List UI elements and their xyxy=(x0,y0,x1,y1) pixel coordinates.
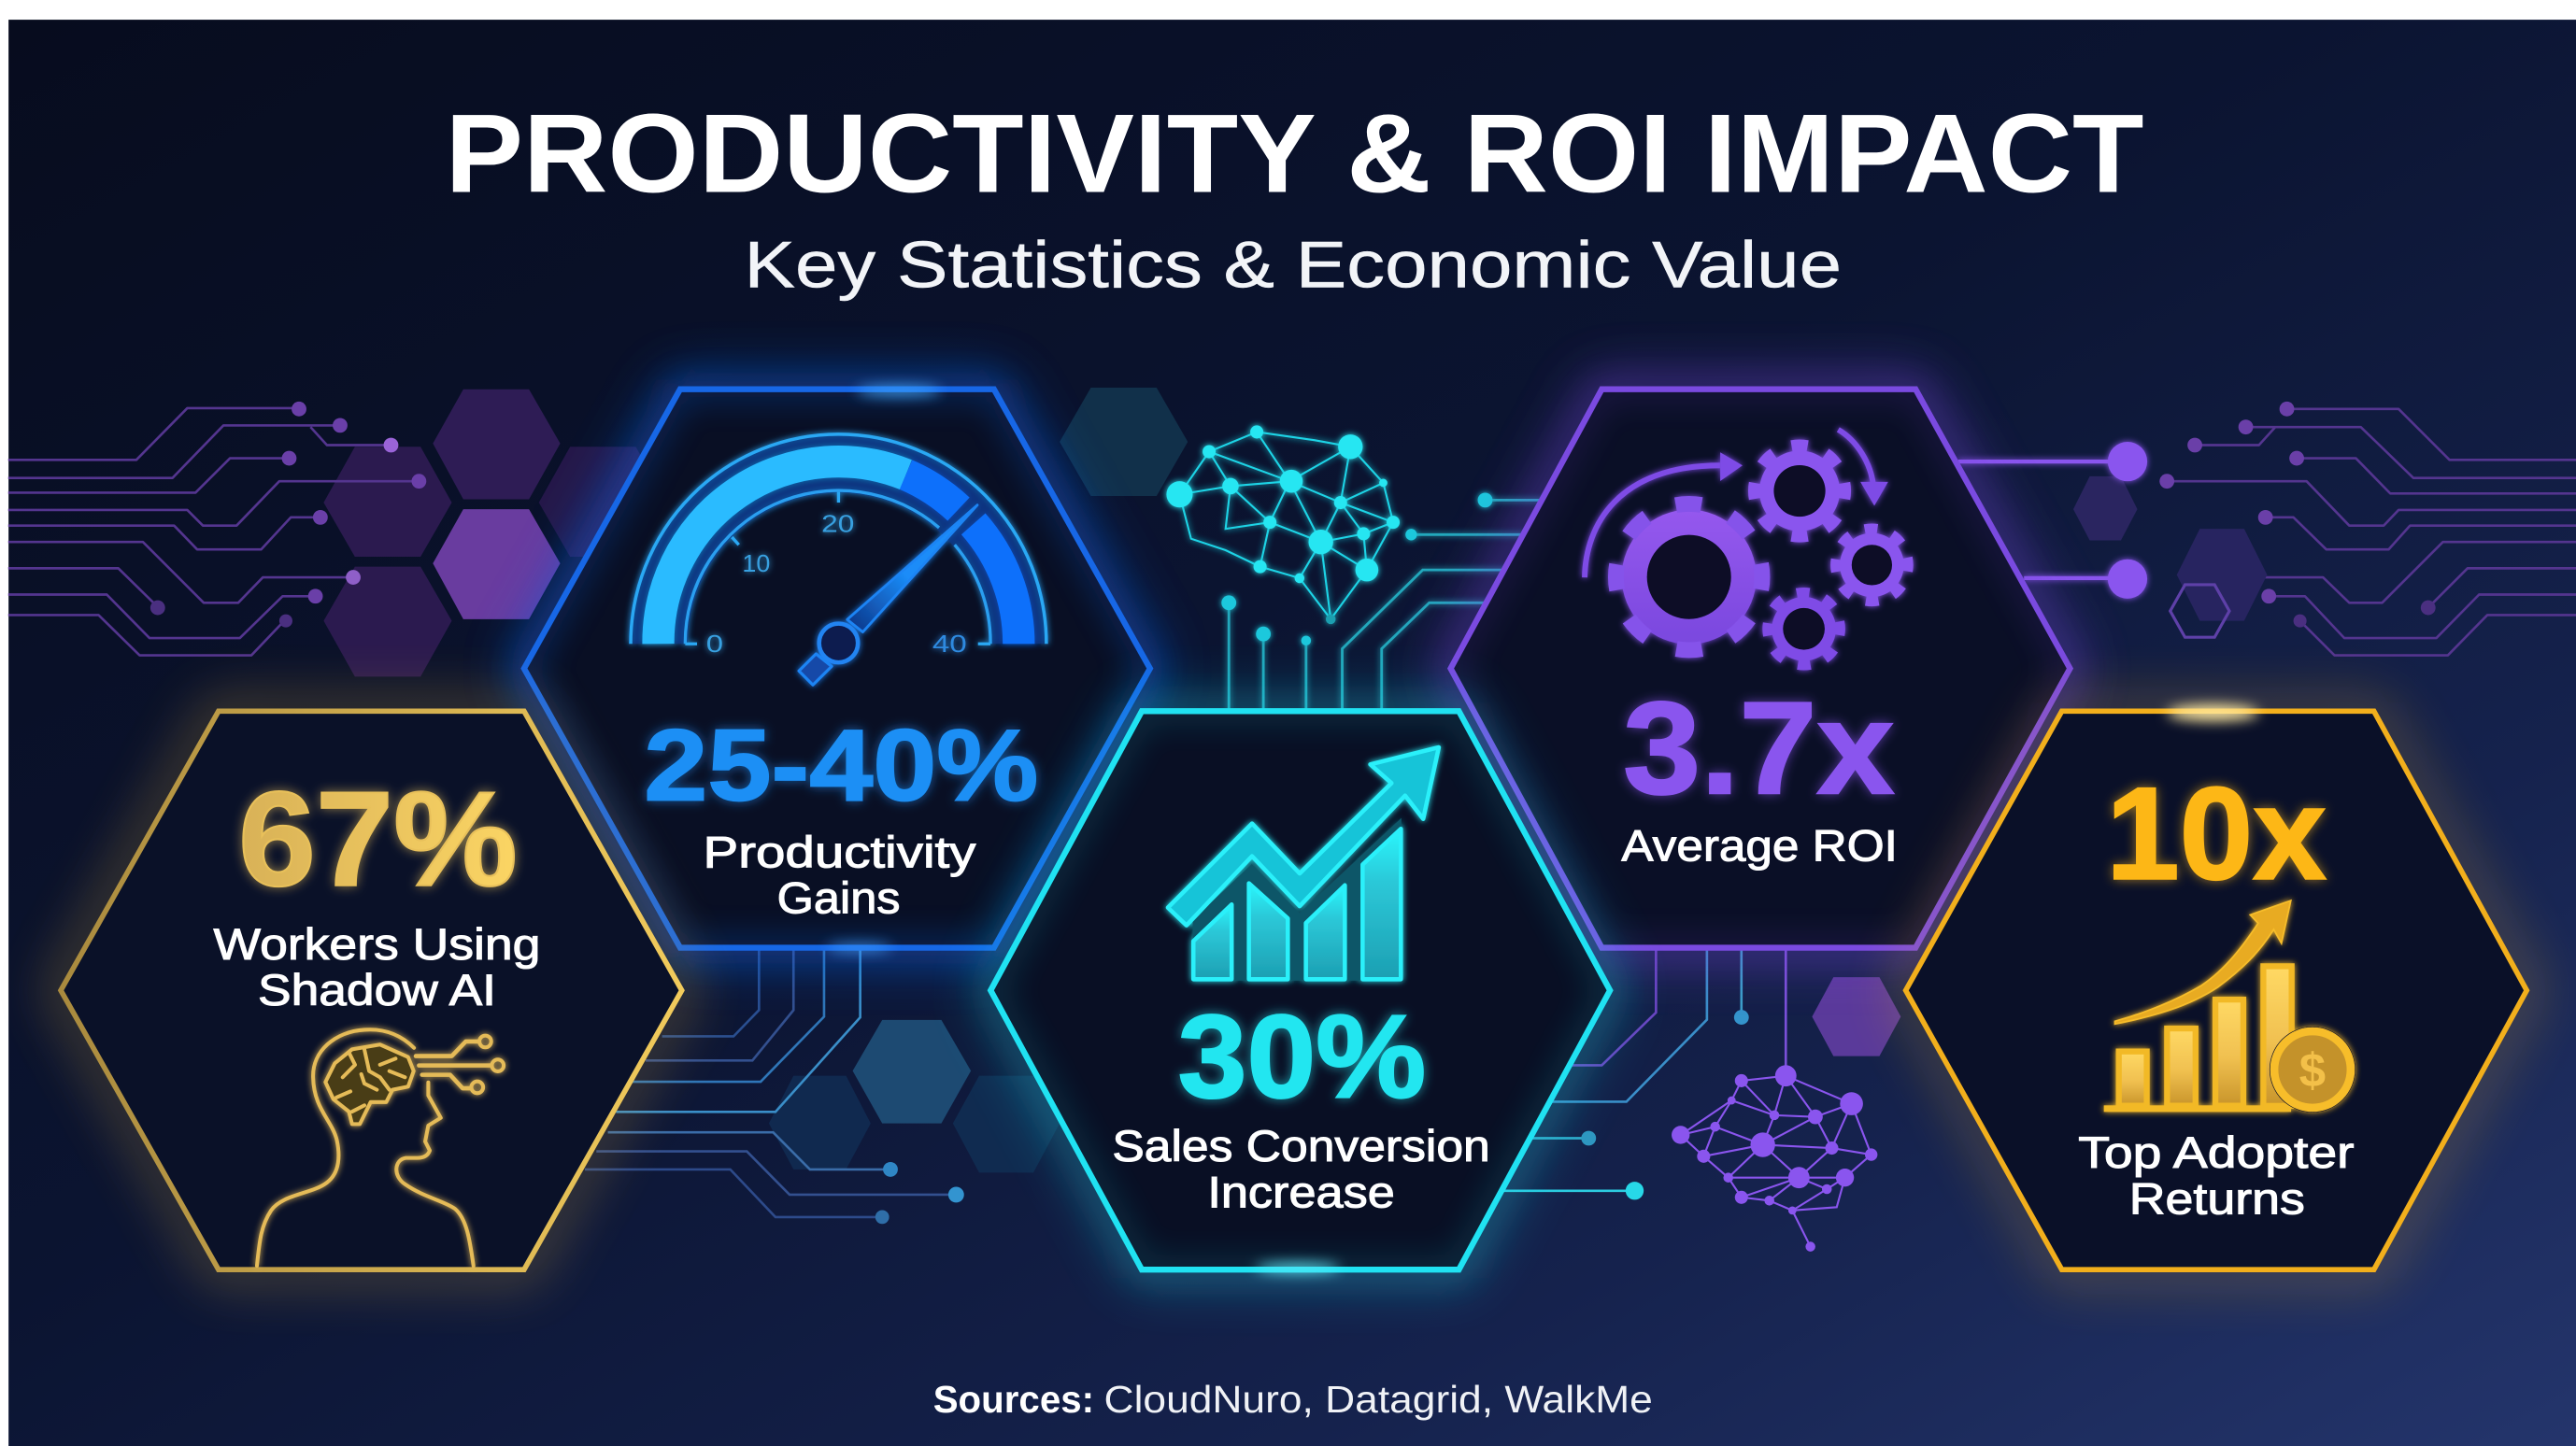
decorative hexagons: lower centre-left blue xyxy=(769,1020,1060,1172)
circuit: cyan upper centre xyxy=(1221,492,1553,711)
label: workers using shadow AI: Workers Using xyxy=(214,920,540,970)
stat: 25-40%: 25-40% xyxy=(644,708,1038,822)
title: PRODUCTIVITY & ROI IMPACT xyxy=(445,92,2144,217)
stat: 3.7x: 3.7x xyxy=(1623,674,1894,821)
label: sales conversion increase: Sales Conversion xyxy=(1112,1122,1490,1171)
circuit: upper left purple xyxy=(8,402,426,656)
panel: top adopter returns xyxy=(1906,704,2526,1269)
label: top adopter returns xyxy=(2078,1128,2355,1224)
label: productivity gains: Productivity xyxy=(704,828,976,877)
label: productivity gains xyxy=(704,828,976,924)
stat: 67%: 67% xyxy=(238,763,518,914)
icon: rising bars with coin xyxy=(2104,900,2355,1113)
stat: 30%: 30% xyxy=(1178,990,1426,1123)
label: top adopter returns: Top Adopter xyxy=(2078,1128,2355,1178)
panel: workers using shadow AI xyxy=(61,711,682,1269)
label: productivity gains: Gains xyxy=(777,874,901,924)
sources line: CloudNuro, Datagrid, WalkMe xyxy=(1104,1378,1653,1421)
sources line: Sources: xyxy=(933,1378,1094,1421)
icon: gears with arrows xyxy=(1585,430,1908,665)
subtitle: Key Statistics & Economic Value xyxy=(745,228,1842,302)
icon: speedometer gauge: 10 xyxy=(742,551,770,577)
icon: speedometer gauge: 20 xyxy=(821,512,854,538)
label: sales conversion increase xyxy=(1112,1122,1490,1217)
decorative hexagon: lower right purple xyxy=(1812,977,1900,1056)
panel: average ROI xyxy=(1451,390,2070,948)
decorative hexagons: right xyxy=(2073,476,2267,637)
label: sales conversion increase: Increase xyxy=(1207,1168,1395,1217)
icon: speedometer gauge: 40 xyxy=(932,631,967,658)
icon: growth chart with arrow xyxy=(1168,747,1439,981)
sources line xyxy=(933,1378,1653,1421)
decorative hexagons: upper left purple xyxy=(323,388,1188,676)
stat: 10x: 10x xyxy=(2106,760,2327,907)
panel: sales conversion increase xyxy=(990,711,1610,1273)
label: workers using shadow AI xyxy=(214,920,540,1015)
icon: speedometer gauge xyxy=(631,434,1046,685)
label: average ROI: Average ROI xyxy=(1621,821,1898,871)
label: top adopter returns: Returns xyxy=(2129,1174,2305,1224)
circuit: lower left blue xyxy=(585,949,964,1224)
icon: head with brain and circuits xyxy=(257,1029,504,1266)
panel: productivity gains xyxy=(524,385,1150,953)
icon: speedometer gauge: 0 xyxy=(706,631,723,658)
icon: rising bars with coin: $ xyxy=(2299,1043,2326,1097)
icon: purple neural brain xyxy=(1672,1065,1877,1252)
connector nodes: right of purple panel xyxy=(1958,442,2147,599)
icon: cyan neural brain xyxy=(1166,425,1400,624)
label: workers using shadow AI: Shadow AI xyxy=(258,966,496,1015)
circuit: lower right xyxy=(1495,949,1786,1199)
circuit: upper right purple xyxy=(2159,402,2576,656)
